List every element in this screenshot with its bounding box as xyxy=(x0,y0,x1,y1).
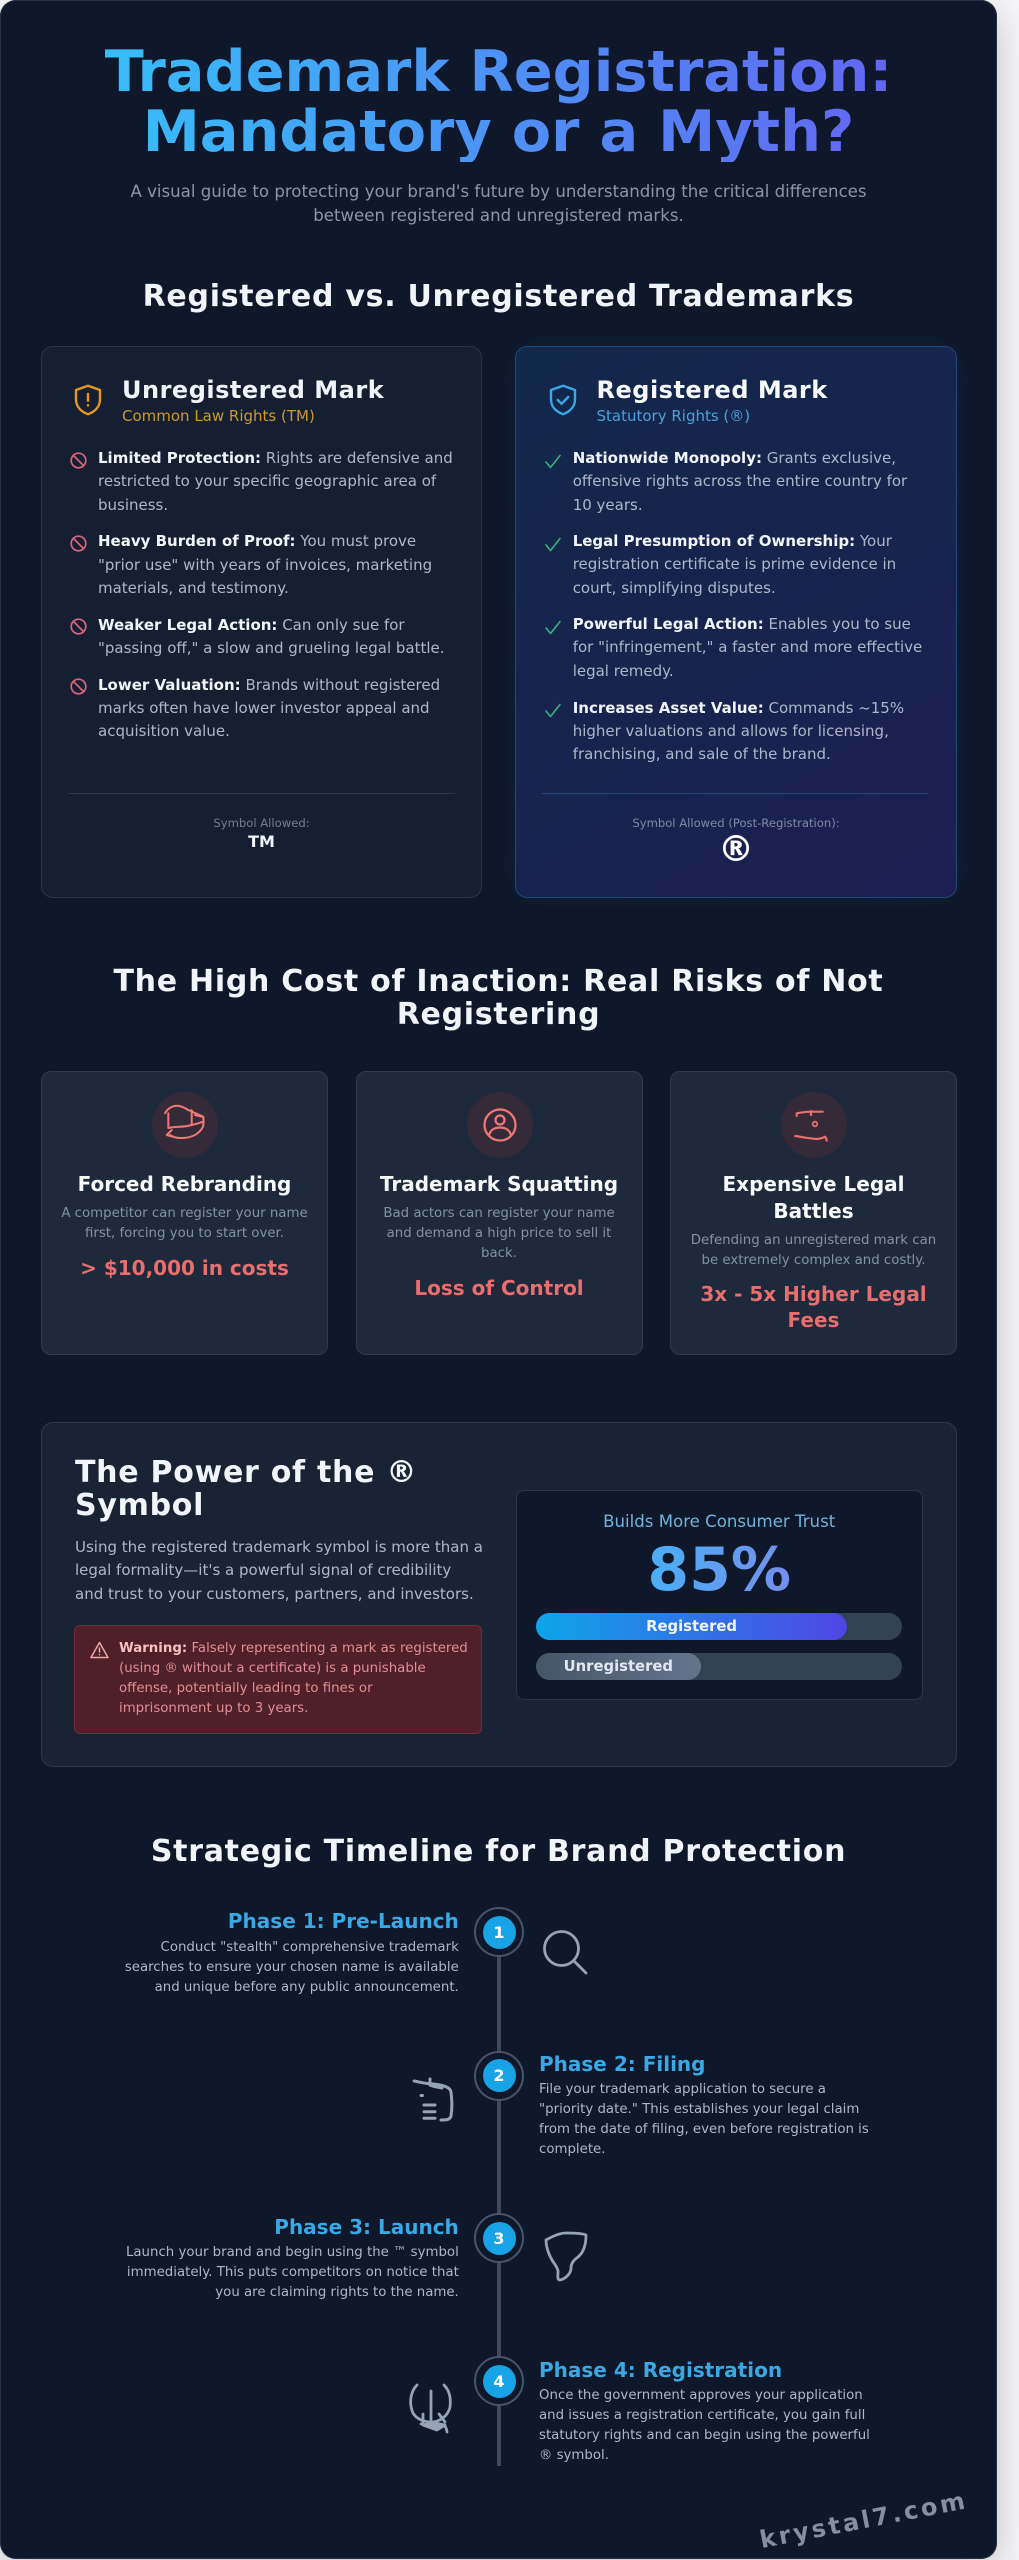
panel: registered mark xyxy=(515,346,957,898)
registered fill xyxy=(536,1612,847,1640)
section heading: risks xyxy=(114,964,884,1032)
phase 4 text xyxy=(539,2357,879,2469)
benefit: nationwide monopoly xyxy=(573,449,908,514)
risk description: first, forcing you to start over. xyxy=(85,1226,284,1241)
subtitle xyxy=(130,182,867,225)
phase 3 text xyxy=(100,2214,459,2308)
symbol allowed label: Symbol Allowed: xyxy=(213,816,310,830)
registered symbol: ® xyxy=(718,829,754,870)
icon: ban xyxy=(70,535,87,552)
phase 4 node: 4 xyxy=(493,2372,505,2390)
bar: unregistered xyxy=(536,1652,902,1680)
phase 3 description xyxy=(126,2243,459,2303)
heading: Symbol xyxy=(75,1488,204,1523)
warning text: imprisonment up to 3 years. xyxy=(119,1701,308,1716)
TM symbol: TM xyxy=(248,832,275,850)
icon: ban xyxy=(70,618,87,635)
risk description xyxy=(383,1206,615,1261)
drawback: limited protection: business. xyxy=(98,496,168,514)
paragraph xyxy=(75,1538,483,1602)
benefit: nationwide monopoly: 10 years. xyxy=(573,496,643,514)
drawback: lower valuation: acquisition value. xyxy=(98,722,230,740)
risk description: Defending an unregistered mark can xyxy=(691,1233,936,1248)
unregistered fill: Unregistered xyxy=(564,1658,673,1674)
phase 2 description: "priority date." This establishes your legal claim xyxy=(539,2102,859,2117)
registered fill: Registered xyxy=(646,1618,737,1634)
drawback: burden of proof: "prior use" with years of invoices, marketing xyxy=(98,556,432,574)
phase 2 node xyxy=(474,2050,524,2100)
benefit: powerful legal action: Powerful Legal Action: Enables you to sue xyxy=(573,615,911,633)
icon: ban xyxy=(70,678,87,695)
section heading: comparison: Registered vs. Unregistered Trademarks xyxy=(143,279,854,314)
subtitle: between registered and unregistered marks. xyxy=(313,206,684,225)
panel: trademark squatting xyxy=(356,1071,642,1355)
benefit: asset value: Increases Asset Value: Commands ~15% xyxy=(573,699,904,717)
risk description: be extremely complex and costly. xyxy=(702,1253,925,1268)
drawback: weaker legal action xyxy=(98,616,445,657)
watermark: krystal7.com xyxy=(757,2486,970,2554)
phase 2 node: 2 xyxy=(493,2066,505,2085)
risk title: Forced Rebranding xyxy=(78,1172,291,1196)
icon: warning triangle xyxy=(90,1642,109,1658)
icon: check shield xyxy=(550,384,576,416)
phase 2 description: complete. xyxy=(539,2142,606,2157)
panel: expensive legal battles xyxy=(670,1071,957,1355)
phase 3 description: Launch your brand and begin using the ™ symbol xyxy=(126,2245,459,2260)
phase 2 description: File your trademark application to secure a xyxy=(539,2082,826,2097)
icon: user circle xyxy=(466,1092,532,1158)
risk stat: Loss of Control xyxy=(414,1276,584,1300)
phase 4 description xyxy=(539,2386,870,2466)
panel: power of the symbol xyxy=(41,1422,957,1767)
unregistered fill xyxy=(536,1652,701,1680)
benefit: powerful legal action: for "infringement," a faster and more effective xyxy=(573,638,922,656)
risk stat: Fees xyxy=(788,1308,839,1332)
phase 4 description: ® symbol. xyxy=(539,2448,609,2463)
risk description: and demand a high price to sell it xyxy=(387,1226,611,1241)
paragraph: Using the registered trademark symbol is more than a xyxy=(75,1538,483,1556)
risk title: Expensive Legal xyxy=(722,1172,904,1196)
registered subheading: Statutory Rights (®) xyxy=(596,406,750,424)
risk title xyxy=(722,1172,904,1223)
risk description: Bad actors can register your name xyxy=(383,1206,615,1221)
benefit: asset value: franchising, and sale of the brand. xyxy=(573,745,831,763)
icon: warning shield xyxy=(74,384,102,416)
benefit: asset value: higher valuations and allows for licensing, xyxy=(573,722,889,740)
phase 2 text xyxy=(539,2052,869,2157)
phase 1 description: and unique before any public announcement. xyxy=(155,1980,459,1995)
section heading: timeline: Strategic Timeline for Brand Protection xyxy=(151,1834,846,1869)
warning callout xyxy=(74,1625,482,1734)
risk description: back. xyxy=(481,1246,517,1261)
paragraph: legal formality—it's a powerful signal of credibility xyxy=(75,1561,451,1579)
list: unregistered drawbacks xyxy=(68,449,455,850)
warning text xyxy=(119,1641,468,1716)
risk description xyxy=(61,1206,308,1241)
big percentage: 85% xyxy=(647,1535,791,1605)
phase 3 description: you are claiming rights to the name. xyxy=(215,2285,459,2300)
icon: legal scales fragment xyxy=(781,1092,847,1158)
phase 3 node: 3 xyxy=(493,2228,505,2248)
timeline xyxy=(497,1956,501,2466)
title: Trademark Registration: xyxy=(105,38,892,105)
chart label: Builds More Consumer Trust xyxy=(603,1512,835,1531)
phase 1 title: Phase 1: Pre-Launch xyxy=(228,1909,459,1933)
benefit: powerful legal action xyxy=(573,615,922,680)
icon: magnifier xyxy=(543,1930,588,1974)
phase 3 title: Phase 3: Launch xyxy=(274,2214,459,2238)
drawback: burden of proof: Heavy Burden of Proof: You must prove xyxy=(98,532,416,550)
benefit: legal presumption: registration certificate is prime evidence in xyxy=(573,555,896,573)
phase 3 description: immediately. This puts competitors on notice that xyxy=(127,2265,459,2280)
benefit: nationwide monopoly: Nationwide Monopoly: Grants exclusive, xyxy=(573,449,896,467)
phase 1 node: 1 xyxy=(493,1923,505,1942)
icon: anchor emblem xyxy=(409,2384,453,2434)
unregistered heading: Unregistered Mark xyxy=(122,376,384,404)
benefit: asset value xyxy=(573,699,904,763)
benefit: legal presumption: court, simplifying disputes. xyxy=(573,579,776,597)
risk description: A competitor can register your name xyxy=(61,1206,308,1221)
list: registered benefits xyxy=(542,449,928,870)
icon: badge outline xyxy=(544,2231,588,2282)
icon: check xyxy=(545,704,561,718)
phase 2 description xyxy=(539,2082,869,2157)
benefit: powerful legal action: legal remedy. xyxy=(573,662,674,680)
phase 1 description: Conduct "stealth" comprehensive trademark xyxy=(161,1940,459,1955)
icon: rebrand arrows xyxy=(152,1092,218,1158)
risk stat: > $10,000 in costs xyxy=(80,1256,289,1280)
risk title: Battles xyxy=(773,1199,854,1223)
drawback: weaker legal action: Weaker Legal Action: Can only sue for xyxy=(98,616,405,634)
panel: unregistered mark xyxy=(41,346,482,898)
icon: check xyxy=(545,454,561,468)
drawback: weaker legal action: "passing off," a slow and grueling legal battle. xyxy=(98,639,445,657)
benefit: legal presumption: Legal Presumption of Ownership: Your xyxy=(573,532,892,550)
phase 2 description: from the date of filing, even before registration is xyxy=(539,2122,869,2137)
phase 4 title: Phase 4: Registration xyxy=(539,2358,782,2382)
drawback: lower valuation: Lower Valuation: Brands without registered xyxy=(98,676,440,694)
phase 4 description: Once the government approves your application xyxy=(539,2388,863,2403)
title xyxy=(105,38,892,165)
drawback: limited protection: restricted to your specific geographic area of xyxy=(98,472,436,490)
risk stat xyxy=(700,1282,927,1332)
drawback: limited protection: Limited Protection: Rights are defensive and xyxy=(98,449,453,467)
subtitle: A visual guide to protecting your brand's future by understanding the critical differences xyxy=(130,182,867,201)
phase 2 title: Phase 2: Filing xyxy=(539,2052,705,2076)
drawback: lower valuation xyxy=(98,676,440,740)
warning text: offense, potentially leading to fines or xyxy=(119,1681,373,1696)
paragraph: and trust to your customers, partners, and investors. xyxy=(75,1584,474,1602)
heading xyxy=(75,1455,417,1523)
risk title: Trademark Squatting xyxy=(380,1172,618,1196)
drawback: limited protection xyxy=(98,449,453,514)
drawback: burden of proof xyxy=(98,532,432,597)
icon: ban xyxy=(70,452,87,469)
risk description xyxy=(691,1233,936,1268)
symbol allowed label: Symbol Allowed (Post-Registration): xyxy=(632,816,840,830)
phase 1 node xyxy=(474,1907,524,1957)
icon: check xyxy=(545,620,561,634)
section heading: risks: The High Cost of Inaction: Real Risks of Not xyxy=(114,964,884,999)
phase 4 description: statutory rights and can begin using the powerful xyxy=(539,2428,870,2443)
icon: document fragment xyxy=(412,2078,454,2122)
section heading: risks: Registering xyxy=(397,997,600,1032)
title: Mandatory or a Myth? xyxy=(143,98,854,165)
phase 1 description xyxy=(125,1940,459,1995)
icon: check xyxy=(545,538,561,552)
phase 4 node xyxy=(474,2356,524,2406)
heading: The Power of the ® xyxy=(75,1455,417,1490)
phase 4 description: and issues a registration certificate, you gain full xyxy=(539,2408,865,2423)
warning text: Warning: Falsely representing a mark as registered xyxy=(119,1641,468,1656)
registered heading: Registered Mark xyxy=(596,376,828,404)
risk stat: 3x - 5x Higher Legal xyxy=(700,1282,927,1306)
drawback: burden of proof: materials, and testimony. xyxy=(98,579,289,597)
bar: registered xyxy=(536,1612,902,1640)
phase 3 node xyxy=(474,2213,524,2263)
phase 1 text xyxy=(125,1909,459,1995)
unregistered subheading: Common Law Rights (TM) xyxy=(122,406,315,424)
benefit: legal presumption xyxy=(573,532,896,597)
phase 1 description: searches to ensure your chosen name is available xyxy=(125,1960,459,1975)
panel: forced rebranding xyxy=(41,1071,328,1355)
trust chart xyxy=(516,1490,923,1700)
drawback: lower valuation: marks often have lower investor appeal and xyxy=(98,699,430,717)
benefit: nationwide monopoly: offensive rights across the entire country for xyxy=(573,472,907,490)
warning text: (using ® without a certificate) is a punishable xyxy=(119,1661,426,1676)
